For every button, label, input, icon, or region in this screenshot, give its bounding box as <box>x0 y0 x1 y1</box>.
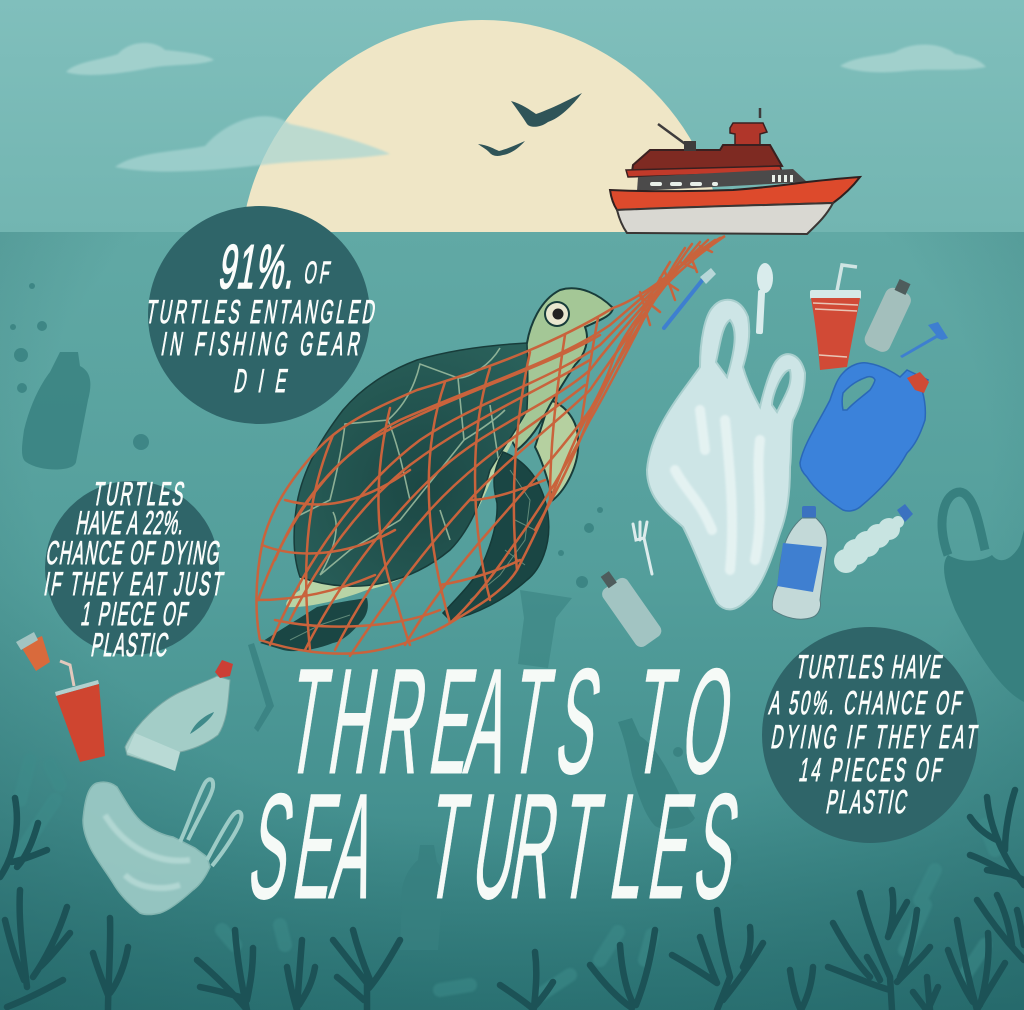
cloud: top right <box>840 45 986 72</box>
fishing net <box>256 236 725 656</box>
sun <box>246 20 713 232</box>
plastic bag: large <box>647 300 805 609</box>
text circle: 50 percent: TURTLES HAVE <box>794 648 945 685</box>
text circle: 22 percent <box>42 475 226 663</box>
coral shadows <box>15 760 995 995</box>
turtle: back flipper light <box>535 400 578 500</box>
title line 2: SEA TURTLES <box>240 763 749 931</box>
turtle: shell <box>294 343 528 586</box>
toothbrush <box>664 268 716 328</box>
ship <box>610 108 860 234</box>
entanglement sentence: DIE <box>232 362 290 399</box>
word: of: OF <box>302 257 333 290</box>
ship: windows <box>650 175 793 186</box>
ship: upper deck <box>632 145 782 172</box>
background ghost bag <box>942 492 1024 702</box>
turtle: shell scutes <box>300 348 505 575</box>
sky background <box>0 0 1024 233</box>
ship: red stripe <box>626 166 782 177</box>
red cup with straw <box>810 265 861 370</box>
entanglement sentence: TURTLES ENTANGLED <box>144 293 378 330</box>
turtle: eye <box>544 301 570 327</box>
turtle: flipper veins <box>290 470 535 640</box>
cloud: top left <box>66 43 214 75</box>
turtle: rear flipper dark <box>260 598 368 651</box>
ship: white hull <box>617 203 833 234</box>
coral: bottom-middle and right clusters <box>500 790 1024 1010</box>
spoon <box>756 263 773 334</box>
ship: cabin <box>637 169 807 191</box>
net: cross ribs <box>306 435 333 650</box>
stat heading 91%: 91%. <box>215 232 302 302</box>
ship: red hull <box>610 177 860 210</box>
sea vignette <box>0 232 1024 1010</box>
text circle: 50 percent: 14 PIECES OF <box>797 751 945 788</box>
text circle: 50 percent: PLASTIC <box>824 783 910 820</box>
text circle: 50 percent: DYING IF THEY EAT <box>769 718 980 755</box>
razor <box>900 322 948 358</box>
turtle: neck and head <box>500 288 613 450</box>
orange pill bottle <box>16 632 50 671</box>
text circle: 22 percent: TURTLES <box>91 475 187 512</box>
text circle: 22 percent: 1 PIECE OF <box>79 595 191 632</box>
ship: mast <box>658 108 760 146</box>
text circle: 50 percent <box>762 627 980 843</box>
title line 1: THREATS TO <box>278 638 744 806</box>
ship: funnel <box>730 123 767 146</box>
background ghost debris <box>10 283 744 950</box>
fork <box>633 522 652 574</box>
plastic bag: lower left <box>83 779 241 914</box>
cloud: middle over sun <box>115 116 390 172</box>
bleach bottle <box>125 660 233 771</box>
text circle: 91 percent <box>144 206 378 424</box>
net: outline <box>256 236 725 654</box>
entanglement sentence <box>144 293 378 399</box>
crushed bottle <box>834 504 913 573</box>
turtle: front flipper dark <box>443 452 549 620</box>
text circle: 22 percent: PLASTIC <box>89 626 171 663</box>
turtle: plastron <box>286 400 527 607</box>
grey bottle top right <box>862 276 918 355</box>
net: long strands <box>258 238 720 600</box>
bag highlights <box>675 410 760 570</box>
blue jug <box>800 363 929 511</box>
net: lower cross arcs <box>258 575 375 600</box>
entanglement sentence: IN FISHING GEAR <box>159 325 363 362</box>
text circle: 22 percent: CHANCE OF DYING <box>44 534 223 571</box>
birds <box>478 93 582 156</box>
title <box>240 638 749 931</box>
text circle: 50 percent: A 50%. CHANCE OF <box>767 684 965 721</box>
sea background <box>0 232 1024 1010</box>
net: mesh cords near the ship <box>640 246 712 312</box>
turtle <box>260 288 613 651</box>
red cup with striped straw <box>55 661 105 762</box>
ship: gun box <box>684 141 696 151</box>
grey bottle center <box>592 565 664 650</box>
water bottle <box>772 506 827 619</box>
text circle: 22 percent: HAVE A 22%. <box>74 504 187 541</box>
text circle: 22 percent: IF THEY EAT JUST <box>42 565 226 602</box>
coral: bottom-left cluster <box>0 798 400 1010</box>
